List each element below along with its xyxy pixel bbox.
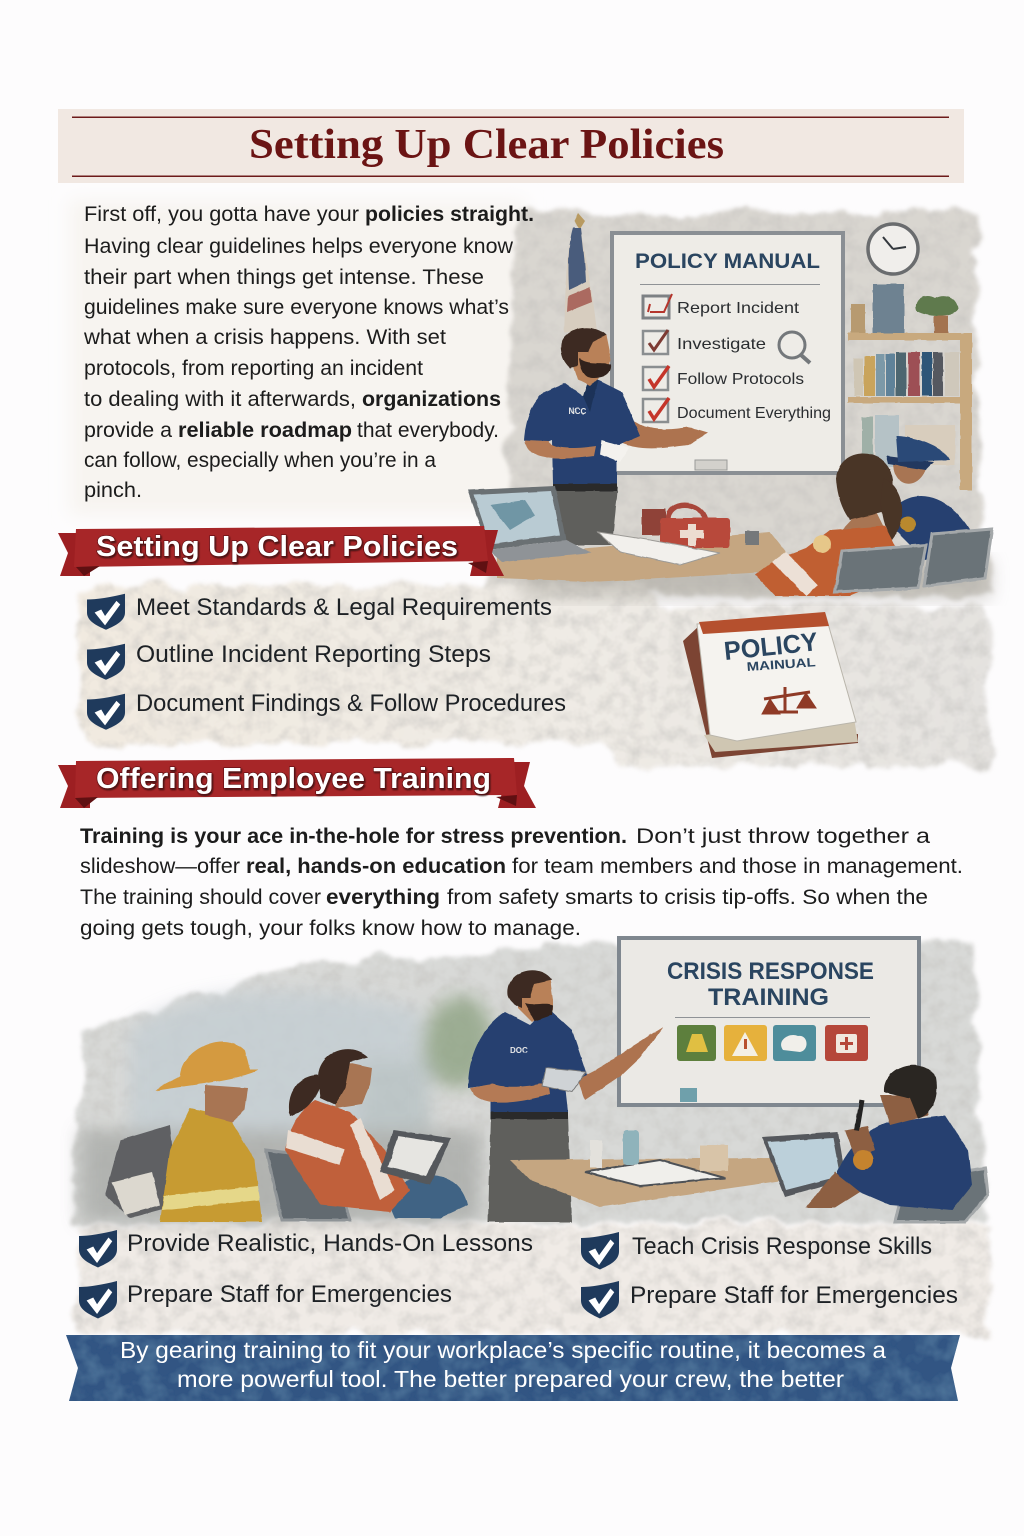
training paragraph bbox=[80, 824, 963, 940]
tablet bbox=[380, 1130, 451, 1185]
whiteboard bbox=[612, 233, 843, 473]
first aid kit bbox=[668, 505, 706, 520]
polo shirt bbox=[524, 380, 640, 484]
icon: shield check bbox=[79, 1230, 117, 1268]
icon: shield check bbox=[87, 694, 125, 730]
board heading: POLICY MANUAL bbox=[635, 250, 820, 273]
checklist on board: Follow Protocols bbox=[677, 371, 804, 388]
hazy background room bbox=[80, 992, 493, 1222]
head bbox=[572, 335, 611, 386]
training paragraph: Training is your ace in-the-hole for stress prevention. bbox=[80, 824, 627, 848]
magnifier icon bbox=[779, 332, 810, 363]
intro paragraph: guidelines make sure everyone knows what’s bbox=[84, 295, 509, 319]
presenter: NCC bbox=[569, 407, 587, 416]
training board bbox=[619, 938, 919, 1105]
training paragraph: going gets tough, your folks know how to manage. bbox=[80, 916, 581, 940]
chairs bbox=[835, 529, 992, 592]
ribbon heading: Offering Employee Training bbox=[96, 763, 491, 795]
bookshelf bbox=[848, 284, 972, 490]
training paragraph: Don’t just throw together a bbox=[636, 824, 930, 848]
training paragraph: The training should cover bbox=[80, 885, 321, 909]
near arm bbox=[470, 1082, 550, 1103]
presenter bbox=[524, 328, 708, 545]
desk and objects bbox=[468, 486, 800, 582]
icon: warning bbox=[724, 1025, 767, 1061]
intro paragraph: First off, you gotta have your bbox=[84, 202, 359, 226]
checklist on board: Document Everything bbox=[677, 405, 831, 422]
intro paragraph: what when a crisis happens. With set bbox=[83, 325, 446, 349]
instructor: DOC bbox=[510, 1046, 528, 1055]
item: emergencies: Prepare Staff for Emergencies bbox=[630, 1282, 958, 1309]
intro paragraph: reliable roadmap bbox=[178, 418, 352, 442]
illustration: policy manual briefing bbox=[468, 213, 992, 598]
illustration: crisis response training bbox=[80, 938, 988, 1222]
book subtitle: MAINUAL bbox=[746, 655, 816, 674]
item: findings: Document Findings & Follow Procedures bbox=[136, 690, 566, 717]
training paragraph: for team members and those in management. bbox=[512, 854, 963, 878]
checklist on board: Investigate bbox=[677, 336, 766, 353]
illustration: policy manual book bbox=[683, 612, 858, 758]
title banner bbox=[58, 109, 964, 183]
wall clock bbox=[868, 224, 918, 274]
checklist: policies bbox=[87, 594, 566, 730]
intro paragraph: to dealing with it afterwards, bbox=[84, 387, 356, 411]
belt bbox=[553, 483, 617, 491]
head bbox=[880, 1095, 928, 1125]
section ribbon: setting up clear policies bbox=[58, 526, 504, 576]
firefighter bbox=[105, 1042, 262, 1222]
item: emergencies: Prepare Staff for Emergencies bbox=[127, 1281, 452, 1308]
intro paragraph: policies straight. bbox=[365, 202, 534, 226]
helmet bbox=[155, 1042, 258, 1091]
head bbox=[205, 1085, 248, 1122]
pointing arm bbox=[578, 1027, 663, 1100]
chair bbox=[895, 1168, 988, 1222]
intro paragraph: organizations bbox=[362, 387, 501, 411]
training paragraph: everything bbox=[326, 885, 440, 909]
paperwork bbox=[598, 532, 720, 565]
intro paragraph: Having clear guidelines helps everyone know bbox=[84, 234, 513, 258]
checklist on board: Report Incident bbox=[677, 300, 800, 317]
intro paragraph: can follow, especially when you’re in a bbox=[84, 448, 436, 472]
trousers bbox=[488, 1115, 572, 1222]
icon: green helmet bbox=[677, 1025, 716, 1061]
book title: POLICY bbox=[722, 626, 819, 666]
training paragraph: real, hands-on education bbox=[246, 854, 506, 878]
laptop bbox=[762, 1132, 846, 1197]
icon: shield check bbox=[87, 594, 125, 630]
title: Setting Up Clear Policies bbox=[249, 122, 724, 168]
cup bbox=[745, 531, 759, 545]
far arm bbox=[620, 420, 708, 448]
item: lessons: Provide Realistic, Hands-On Lessons bbox=[127, 1230, 533, 1257]
paper wash: training checklist bbox=[78, 1224, 988, 1334]
uniform bbox=[835, 1115, 972, 1210]
intro paragraph: their part when things get intense. These bbox=[84, 265, 484, 289]
paper wash: top illustration bbox=[480, 212, 992, 596]
jeans bbox=[385, 1175, 468, 1218]
item: reporting: Outline Incident Reporting Steps bbox=[136, 641, 491, 668]
closing banner bbox=[66, 1335, 960, 1401]
officer with radio bbox=[805, 1065, 988, 1222]
flag bbox=[564, 213, 597, 332]
checklist on board bbox=[643, 294, 831, 422]
paper wash: training illustration bbox=[72, 945, 985, 1222]
intro paragraph: provide a bbox=[84, 418, 172, 442]
banner text: By gearing training to fit your workplace’s specific routine, it becomes a bbox=[120, 1337, 886, 1363]
seated paramedic with tablet bbox=[266, 1049, 468, 1220]
chair bbox=[266, 1150, 350, 1220]
yellow coat bbox=[160, 1108, 262, 1222]
intro paragraph bbox=[83, 202, 534, 502]
icon: shield check bbox=[87, 644, 125, 680]
ground shading bbox=[520, 560, 990, 598]
item: standards: Meet Standards & Legal Requirements bbox=[136, 594, 552, 621]
section ribbon: offering employee training bbox=[58, 758, 536, 808]
head bbox=[518, 978, 553, 1022]
paper wash: intro text bbox=[70, 200, 525, 515]
intro paragraph: that everybody. bbox=[357, 418, 499, 442]
icon: first aid bbox=[825, 1025, 868, 1061]
orange jacket bbox=[285, 1100, 410, 1212]
seated paramedic bbox=[755, 453, 908, 596]
handout bbox=[600, 440, 629, 462]
backpack bbox=[105, 1125, 178, 1218]
icon: cloud bbox=[773, 1025, 816, 1061]
seated officer bbox=[886, 436, 978, 560]
near arm bbox=[525, 440, 596, 459]
training paragraph: from safety smarts to crisis tip-offs. So when the bbox=[447, 885, 928, 909]
icon: shield check bbox=[581, 1281, 619, 1318]
trousers bbox=[553, 487, 618, 545]
checklist: training, right column bbox=[581, 1232, 958, 1318]
instructor bbox=[468, 970, 663, 1222]
tablet bbox=[542, 1068, 586, 1092]
closing banner: more powerful tool. The better prepared your crew, the better bbox=[177, 1366, 844, 1392]
item: skills: Teach Crisis Response Skills bbox=[632, 1233, 932, 1260]
checklist: training, left column bbox=[79, 1230, 533, 1318]
head bbox=[335, 1060, 372, 1108]
polo shirt bbox=[468, 1008, 587, 1112]
paper wash: checklist and book area bbox=[80, 585, 988, 766]
icon: shield check bbox=[79, 1281, 117, 1318]
ribbon heading: Setting Up Clear Policies bbox=[96, 531, 458, 563]
laptop bbox=[468, 486, 566, 550]
training desk bbox=[510, 1130, 800, 1207]
intro paragraph: protocols, from reporting an incident bbox=[84, 356, 423, 380]
arm bbox=[805, 1172, 860, 1208]
board heading: CRISIS RESPONSE bbox=[667, 958, 874, 985]
icon: shield check bbox=[581, 1232, 619, 1270]
training board: TRAINING bbox=[708, 984, 829, 1011]
icon: scales bbox=[762, 687, 816, 714]
intro paragraph: pinch. bbox=[84, 478, 142, 502]
training paragraph: slideshow—offer bbox=[80, 854, 240, 878]
